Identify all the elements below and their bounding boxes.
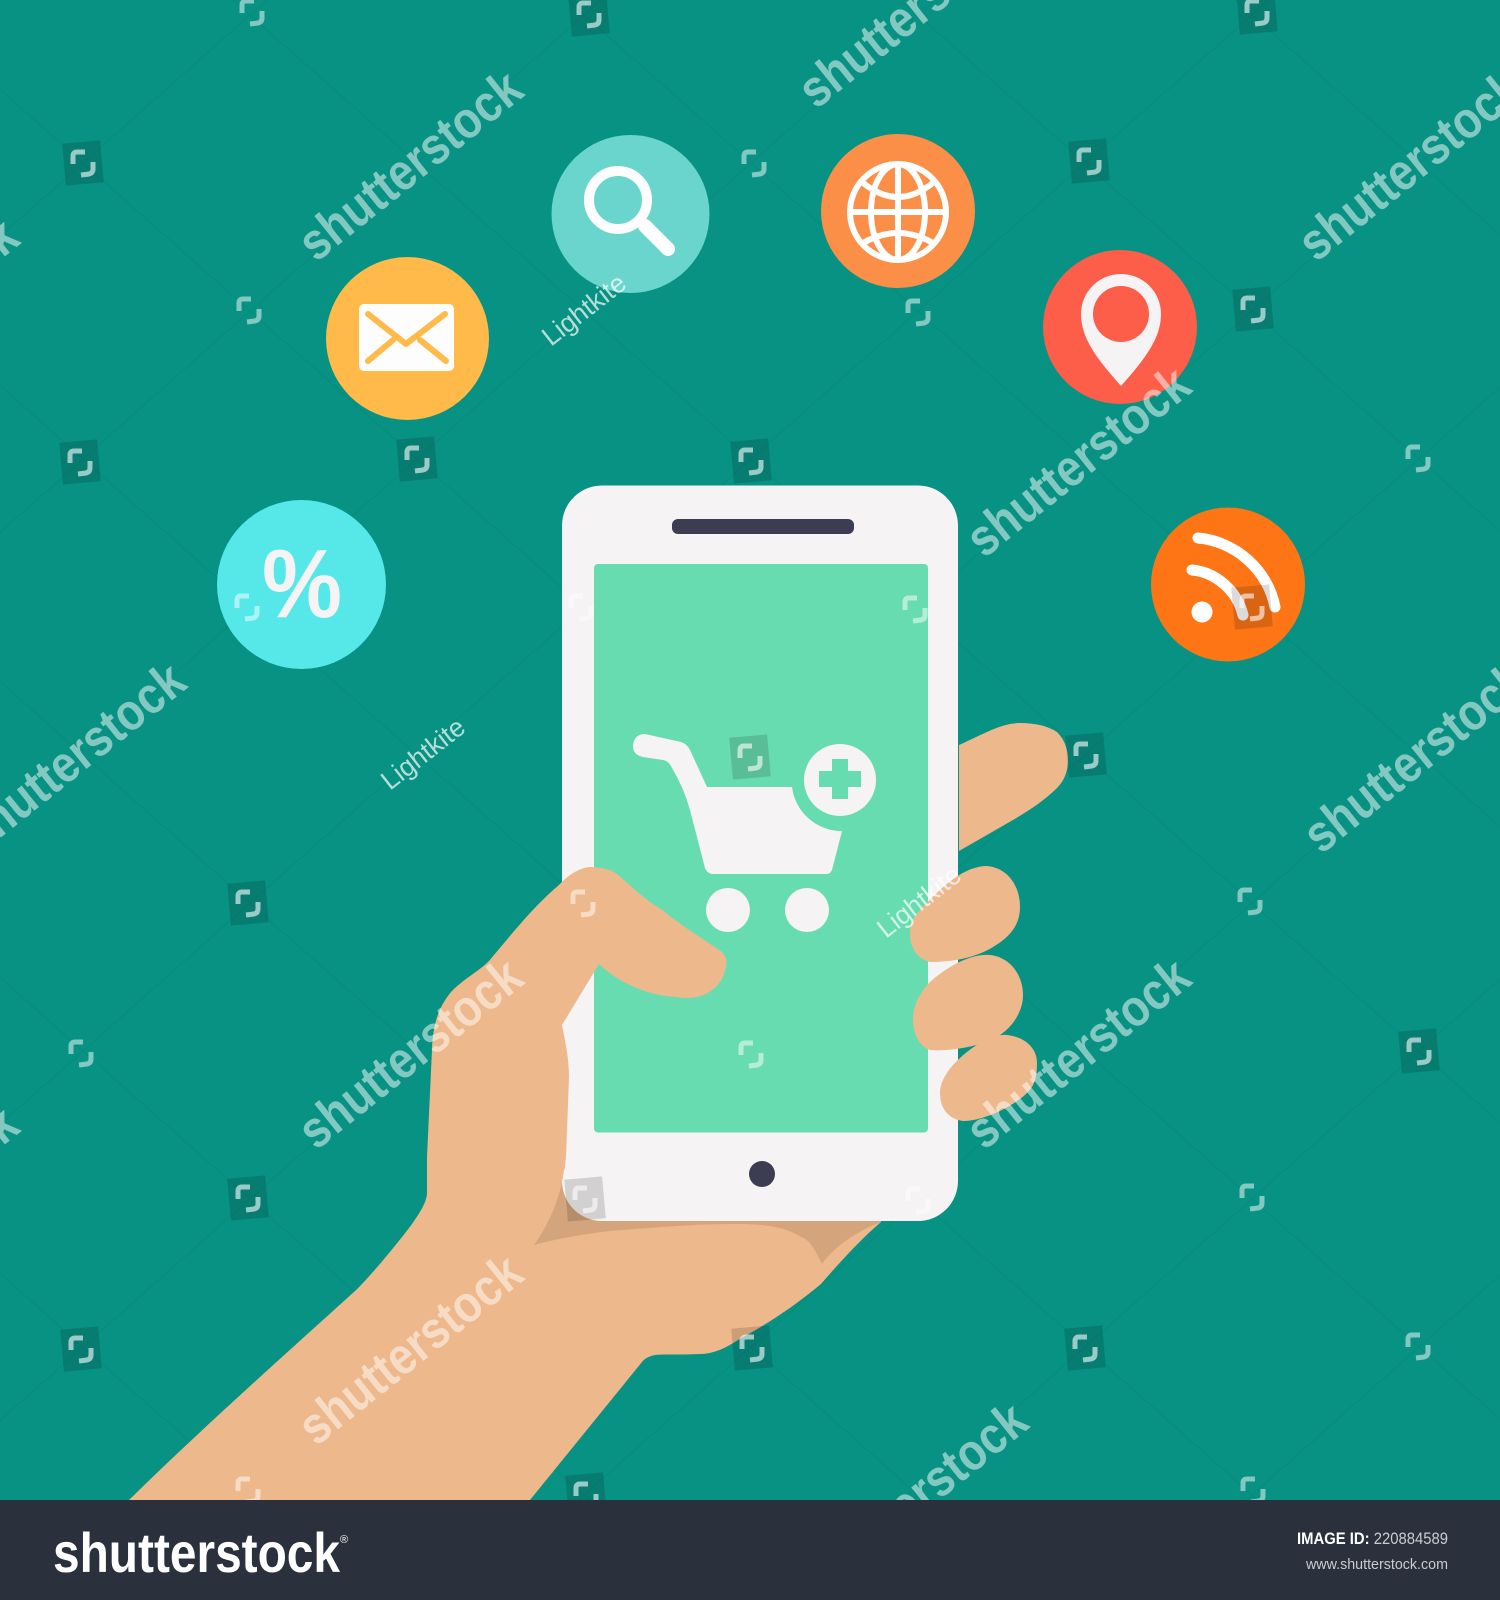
watermark text: Lightkite: Lightkite [375, 712, 471, 796]
phone screen [594, 564, 928, 1132]
watermark text: shutterstock: shutterstock [955, 947, 1201, 1160]
icon: search circle [552, 135, 710, 293]
icon: rss circle [1151, 508, 1305, 662]
watermark text: Lightkite: Lightkite [871, 860, 967, 944]
icon: percent circle: % [262, 529, 342, 638]
footer website: www.shutterstock.com [1305, 1556, 1448, 1573]
phone speaker [672, 519, 854, 534]
hand: arm and palm [129, 961, 881, 1500]
icon: globe circle [821, 134, 975, 288]
phone body [562, 486, 958, 1221]
phone home button [749, 1161, 775, 1187]
footer bar [0, 1500, 1500, 1600]
watermark text: shutterstock: shutterstock [287, 947, 533, 1160]
watermark text: shutterstock: shutterstock [287, 1243, 533, 1456]
watermark text: shutterstock: shutterstock [792, 1391, 1038, 1600]
icon: shopping cart with plus [633, 734, 876, 932]
watermark text: Lightkite: Lightkite [536, 268, 632, 352]
watermark text: shutterstock: shutterstock [955, 355, 1201, 568]
hand: thumb over phone [432, 867, 727, 1245]
hand: fingers over phone [910, 866, 1037, 1121]
footer registered mark: ® [340, 1534, 348, 1546]
footer logo: shutterstock [53, 1521, 341, 1584]
watermark text: shutterstock: shutterstock [287, 59, 533, 272]
watermark text: Lightkite [375, 268, 967, 944]
palm shadow under phone [534, 1170, 881, 1264]
icon: mail circle [326, 257, 489, 420]
footer image id: IMAGE ID: 220884589 [1297, 1529, 1448, 1548]
phone [562, 486, 958, 1221]
index finger behind phone [959, 723, 1068, 851]
icon: location pin circle [1043, 250, 1197, 404]
icon: percent circle [217, 500, 386, 669]
